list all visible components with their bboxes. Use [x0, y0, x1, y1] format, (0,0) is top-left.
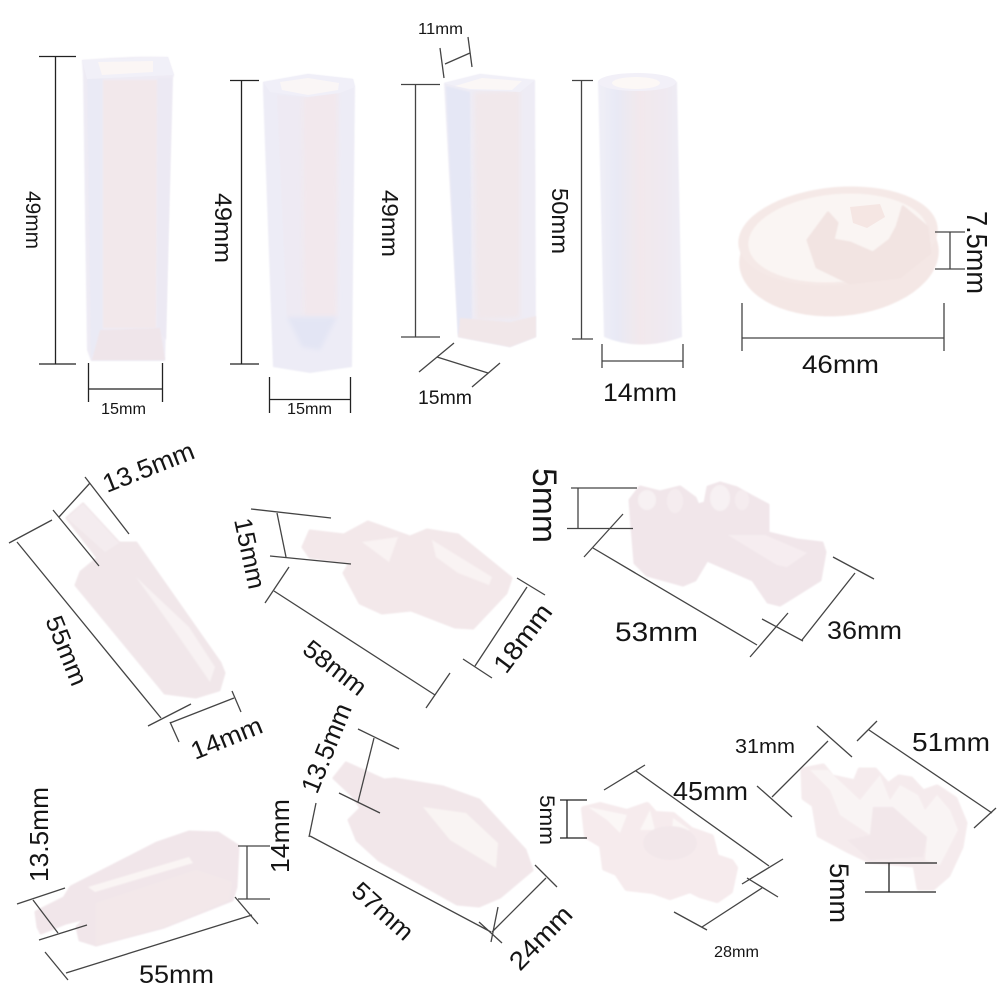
dimension: 55mm top left: 55mm	[39, 612, 93, 690]
dimension: 5mm cross: 5mm	[525, 468, 563, 543]
dimension: 49mm column 1	[21, 56, 76, 364]
dimension: 46mm: 46mm	[802, 351, 879, 379]
dimension: 5mm swirl: 5mm	[535, 795, 558, 845]
dimension: 51mm	[857, 721, 996, 828]
dimension: 5mm cross	[525, 468, 637, 543]
dimension: 5mm crescent	[824, 863, 937, 923]
dimension: 14mm bottom left: 14mm	[265, 799, 295, 873]
mold: gem, top centre	[303, 522, 511, 628]
dimension: 53mm	[584, 514, 788, 657]
dimension: 18mm	[463, 578, 558, 679]
mold: round column	[598, 73, 682, 344]
dimension: 13.5mm top left	[53, 435, 199, 566]
mold: leaf swirl	[584, 805, 735, 900]
dimension: 14mm top left	[170, 691, 267, 766]
dimension: 15mm column 3: 15mm	[418, 388, 472, 409]
dimension: 55mm bottom left	[45, 897, 258, 989]
dimension: 13.5mm top left: 13.5mm	[98, 435, 199, 499]
dimension: 46mm	[742, 303, 944, 379]
dimension: 57mm: 57mm	[346, 877, 419, 946]
mold: crescent	[803, 766, 965, 888]
dimension: 13.5mm centre: 13.5mm	[295, 699, 358, 797]
dimension: 49mm column 3	[377, 84, 440, 337]
dimension: 14mm top left: 14mm	[187, 712, 267, 766]
dimension: 36mm	[762, 557, 902, 645]
dimension: 51mm: 51mm	[912, 727, 990, 757]
dimension: 49mm column 1: 49mm	[21, 191, 44, 249]
dimension: 45mm: 45mm	[673, 776, 748, 806]
dimension: 15mm column 2: 15mm	[287, 401, 332, 418]
dimension: 18mm: 18mm	[487, 597, 558, 679]
mold: long gem, top left	[67, 504, 224, 697]
dimension: 49mm column 3: 49mm	[377, 190, 403, 257]
dimension: 24mm: 24mm	[503, 899, 578, 976]
dimension: 50mm	[547, 80, 593, 339]
dimension: 31mm: 31mm	[735, 736, 795, 758]
dimension: 14mm: 14mm	[603, 379, 677, 407]
dimension: 49mm column 2: 49mm	[209, 193, 236, 263]
dimension: 58mm	[265, 567, 450, 708]
dimension: 55mm bottom left: 55mm	[139, 961, 214, 989]
dimension: 36mm: 36mm	[827, 617, 902, 645]
dimension: 15mm column 1: 15mm	[101, 401, 146, 418]
dimension: 28mm: 28mm	[714, 944, 759, 961]
dimension: 55mm top left	[9, 520, 191, 726]
dimension: 15mm top centre: 15mm	[228, 515, 270, 592]
mold: hexagonal column	[263, 74, 355, 373]
dimension: 15mm column 3	[418, 343, 500, 409]
dimension: 11mm	[418, 21, 472, 78]
mold: square column	[82, 57, 174, 361]
dimension: 57mm	[309, 803, 502, 946]
dimension: 58mm: 58mm	[297, 635, 372, 702]
dimension: 14mm bottom left	[238, 799, 295, 899]
dimension: 5mm crescent: 5mm	[824, 863, 854, 923]
mold: gem, bottom left	[36, 832, 238, 945]
dimension: 31mm	[735, 726, 852, 817]
dimension: 24mm	[491, 865, 578, 976]
dimension: 7.5mm	[935, 211, 992, 294]
dimension: 13.5mm centre	[295, 699, 399, 813]
dimension: 14mm	[602, 344, 683, 407]
dimension: 49mm column 2	[209, 80, 259, 364]
mold: angled column	[444, 74, 536, 347]
dimension: 15mm top centre	[228, 509, 351, 592]
dimension: 15mm column 1	[88, 363, 162, 418]
dimension: 13.5mm bottom left: 13.5mm	[24, 787, 54, 882]
dimension: 13.5mm bottom left	[17, 787, 87, 940]
dimension: 11mm: 11mm	[418, 21, 463, 38]
dimension: 5mm swirl	[535, 795, 587, 845]
dimension: 28mm	[674, 878, 778, 961]
dimension: 53mm: 53mm	[615, 617, 698, 647]
dimension: 50mm: 50mm	[547, 188, 573, 254]
mold: cross	[630, 483, 825, 605]
dimension: 15mm column 2	[269, 377, 350, 418]
mold: coffin gem	[334, 763, 532, 906]
dimension: 45mm	[604, 765, 783, 884]
mold: round disc	[734, 178, 944, 324]
dimension: 7.5mm: 7.5mm	[960, 211, 992, 294]
